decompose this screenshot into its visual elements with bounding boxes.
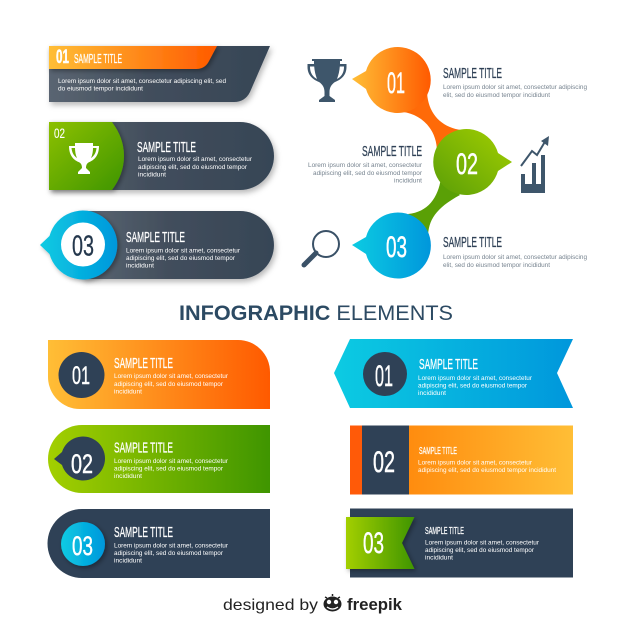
- number 01: 01: [375, 360, 393, 393]
- panel: lower-left banner 03: [48, 509, 270, 578]
- text: item 01: SAMPLE TITLE: [443, 65, 502, 82]
- heading: SAMPLE TITLE: [419, 356, 478, 373]
- text: item 02: [308, 143, 423, 184]
- credit: designed by freepik: designed by: [223, 597, 318, 614]
- orange background: [350, 426, 573, 494]
- green tab: [49, 122, 124, 190]
- number 01: 01: [56, 47, 69, 68]
- panel: lower-right banner 01: [334, 339, 573, 408]
- body text: incididunt: [114, 473, 142, 480]
- text: item 02: Lorem ipsum dolor sit amet, consectetur: [308, 162, 423, 169]
- panel: top-left banner 03: [40, 210, 274, 280]
- body text: [138, 156, 253, 178]
- heading: SAMPLE TITLE: [126, 229, 185, 246]
- number disc: [363, 352, 407, 396]
- body text: adipiscing elit, sed do eiusmod tempor incididunt: [418, 467, 556, 474]
- panel: lower-left banner 02: [48, 425, 270, 493]
- number 03: 03: [72, 531, 93, 561]
- body text: adipiscing elit, sed do eiusmod tempor: [126, 255, 236, 262]
- number disc: [58, 352, 104, 398]
- body text: Lorem ipsum dolor sit amet, consectetur: [114, 458, 229, 465]
- connector: orange: [403, 90, 461, 152]
- body text: [114, 542, 229, 564]
- credit: designed by freepik: freepik: [347, 596, 403, 614]
- bubble 02: [433, 129, 512, 195]
- dark slanted banner: [49, 46, 270, 102]
- panel: top-left banner 01: [49, 46, 270, 102]
- heading: SAMPLE TITLE: [114, 440, 173, 456]
- text: item 01: Lorem ipsum dolor sit amet, consectetur adipiscing: [443, 84, 587, 91]
- text: item 01: elit, sed do eiusmod tempor incididunt: [443, 92, 550, 99]
- body text: Lorem ipsum dolor sit amet, consectetur: [425, 540, 540, 546]
- bubble 02: 02: [456, 148, 478, 181]
- dark pill: [49, 122, 274, 190]
- body text: Lorem ipsum dolor sit amet, consectetur: [114, 542, 229, 550]
- chart: connected bubbles: [352, 47, 512, 278]
- panel: top-left banner 02: [49, 122, 274, 190]
- body text: [425, 540, 540, 562]
- number speech disc: [54, 436, 105, 480]
- white disc: [61, 222, 105, 266]
- body text: incididunt: [138, 172, 166, 178]
- text: item 03: SAMPLE TITLE: [443, 234, 502, 251]
- heading: SAMPLE TITLE: [137, 139, 196, 156]
- number 02: 02: [373, 446, 395, 479]
- icon: magnifier: [304, 231, 339, 265]
- blue speech circle: [40, 210, 117, 280]
- heading: SAMPLE TITLE: [114, 524, 173, 541]
- icon: white trophy: [69, 143, 99, 174]
- body text: Lorem ipsum dolor sit amet, consectetur: [418, 375, 533, 382]
- body text: incididunt: [418, 390, 446, 397]
- body text: Lorem ipsum dolor sit amet, consectetur: [138, 156, 253, 163]
- body text: do eiusmod tempor incididunt: [58, 86, 143, 92]
- dark block: [362, 426, 409, 494]
- heading: SAMPLE TITLE: [419, 445, 457, 457]
- body text: [114, 373, 229, 396]
- green shape: [48, 425, 270, 493]
- panel: lower-right banner 03: [346, 508, 573, 578]
- text: item 02: adipiscing elit, sed do eiusmod tempor: [313, 170, 423, 177]
- body text: incididunt: [114, 388, 142, 396]
- orange shape: [48, 340, 270, 409]
- body text: [58, 78, 226, 92]
- blue disc: [61, 522, 105, 566]
- icon: dark trophy: [308, 59, 346, 102]
- bubble 03: [352, 212, 431, 278]
- orange strip: [350, 426, 362, 494]
- body text: adipiscing elit, sed do eiusmod tempor: [425, 547, 535, 554]
- panel: lower-right banner 02: [350, 426, 573, 494]
- body text: Lorem ipsum dolor sit amet, consectetur: [418, 460, 533, 466]
- number 02: 02: [71, 449, 93, 479]
- body text: [114, 458, 229, 480]
- heading: SAMPLE TITLE: [74, 52, 122, 66]
- body text: [418, 375, 533, 397]
- bubble 01: [352, 47, 431, 113]
- number 01: 01: [72, 362, 90, 390]
- dark shape: [48, 509, 270, 578]
- body text: Lorem ipsum dolor sit amet, consectetur adipiscing elit, sed: [58, 78, 226, 85]
- panel: lower-left banner 01: [48, 340, 270, 409]
- connector: green: [408, 178, 460, 238]
- body text: incididunt: [114, 558, 142, 564]
- body text: Lorem ipsum dolor sit amet, consectetur: [126, 248, 241, 254]
- text: item 03: elit, sed do eiusmod tempor incididunt: [443, 262, 550, 269]
- text: item 02: SAMPLE TITLE: [362, 143, 422, 160]
- body text: Lorem ipsum dolor sit amet, consectetur: [114, 373, 229, 380]
- number 03: 03: [72, 230, 94, 262]
- body text: incididunt: [425, 554, 453, 562]
- heading: SAMPLE TITLE: [114, 355, 173, 372]
- body text: adipiscing elit, sed do eiusmod tempor: [114, 466, 224, 472]
- green flag: [346, 517, 414, 569]
- body text: [126, 248, 241, 270]
- text: item 01: [443, 65, 587, 99]
- body text: adipiscing elit, sed do eiusmod tempor: [114, 381, 224, 388]
- body text: adipiscing elit, sed do eiusmod tempor: [114, 550, 224, 557]
- body text: adipiscing elit, sed do eiusmod tempor: [138, 164, 248, 171]
- icon: freepik mascot: [324, 594, 342, 612]
- bubble 03: 03: [386, 231, 407, 264]
- icon: growth chart: [521, 136, 549, 193]
- text: item 03: Lorem ipsum dolor sit amet, consectetur adipiscing: [443, 254, 587, 261]
- text: item 03: [443, 234, 587, 269]
- dark background: [350, 508, 573, 578]
- number 03: 03: [363, 527, 384, 560]
- heading: SAMPLE TITLE: [425, 525, 464, 537]
- title: INFOGRAPHIC ELEMENTS: [179, 302, 453, 325]
- text: item 02: incididunt: [394, 178, 422, 184]
- dark pill: [82, 211, 274, 279]
- credit: designed by freepik: [223, 594, 403, 614]
- body text: incididunt: [126, 262, 154, 270]
- bubble 01: 01: [387, 67, 405, 100]
- number 02: 02: [54, 125, 65, 141]
- orange header strip: [49, 46, 217, 69]
- blue arrow ribbon: [334, 339, 573, 408]
- body text: [418, 460, 556, 474]
- body text: adipiscing elit, sed do eiusmod tempor: [418, 382, 528, 390]
